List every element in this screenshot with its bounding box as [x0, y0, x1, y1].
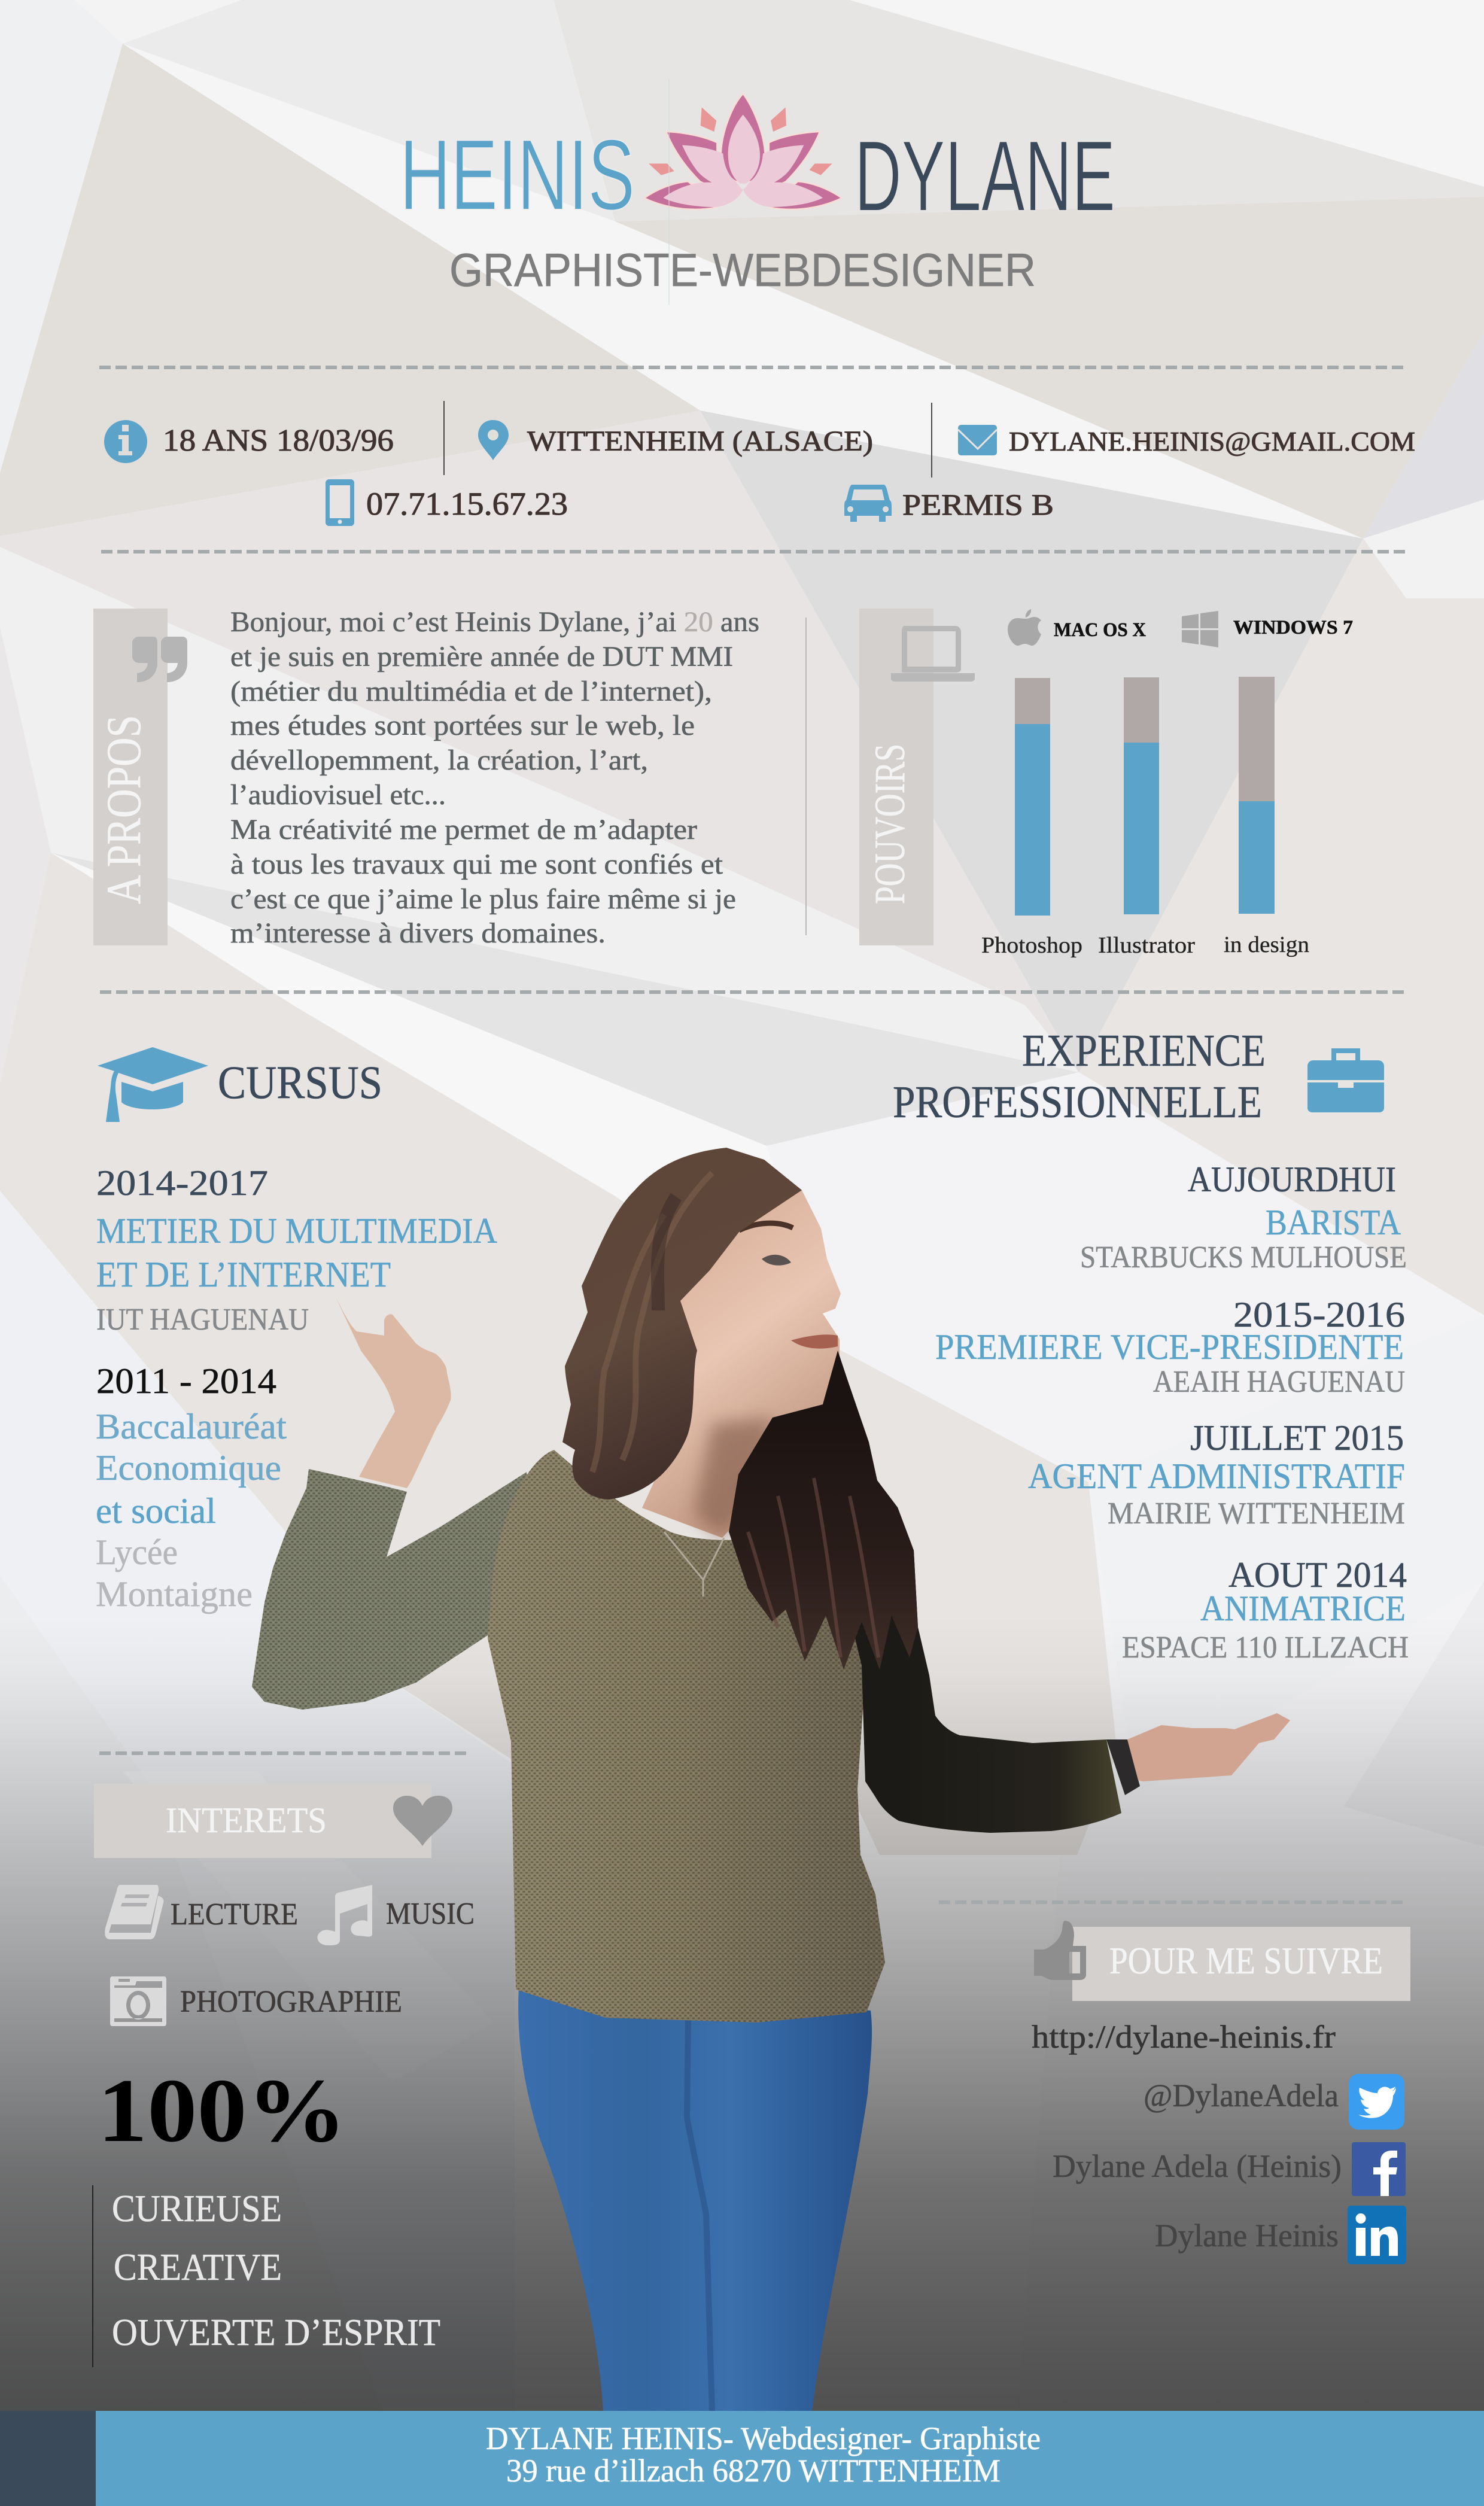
text block: about me: Ma créativité me permet de m’adapter [230, 814, 697, 846]
icon: heart [393, 1796, 452, 1846]
label: photographie: PHOTOGRAPHIE [180, 1985, 402, 2019]
list: experience entries: ANIMATRICE [1200, 1589, 1406, 1628]
website link: http://dylane-heinis.fr [1032, 2019, 1336, 2055]
list: cursus entries: 2011 - 2014 [96, 1361, 276, 1401]
text block: about me: c’est ce que j’aime le plus faire même si je [230, 883, 736, 915]
icon: envelope [958, 425, 997, 455]
text block: about me: (métier du multimédia et de l’internet), [230, 676, 712, 707]
bar: illustrator [1124, 677, 1159, 914]
necklace [664, 1532, 724, 1596]
panel: a propos [93, 609, 187, 945]
text block: about me: mes études sont portées sur le web, le [230, 710, 695, 741]
label: mac os x: MAC OS X [1054, 619, 1146, 641]
icon: lotus logo [644, 94, 842, 209]
list: experience entries: AEAIH HAGUENAU [1153, 1365, 1405, 1399]
list: cursus entries: METIER DU MULTIMEDIA [96, 1211, 497, 1251]
label: illustrator: Illustrator [1098, 933, 1195, 958]
list: experience entries: AGENT ADMINISTRATIF [1028, 1456, 1405, 1496]
email address: DYLANE.HEINIS@GMAIL.COM [1009, 426, 1415, 457]
experience title line 1: EXPERIENCE [1022, 1026, 1266, 1076]
location: WITTENHEIM (ALSACE) [527, 425, 873, 457]
list: experience entries: JUILLET 2015 [1190, 1418, 1404, 1458]
text block: about me: et je suis en première année de DUT MMI [230, 641, 733, 673]
label: photoshop: Photoshop [981, 933, 1082, 958]
person: standing woman photo cut-out [252, 1148, 1290, 2411]
list: experience entries: BARISTA [1266, 1203, 1401, 1242]
open right hand [1127, 1713, 1290, 1781]
panel: pour me suivre [1034, 1921, 1410, 2001]
icon: briefcase [1307, 1048, 1384, 1112]
footer name line: DYLANE HEINIS- Webdesigner- Graphiste [486, 2420, 1041, 2456]
icon: windows [1182, 611, 1218, 647]
text block: about me: à tous les travaux qui me sont confiés et [230, 848, 723, 880]
list: cursus entries: 2014-2017 [96, 1163, 268, 1203]
social: linkedin: Dylane Heinis [1155, 2218, 1339, 2253]
icon: apple [1008, 609, 1041, 646]
panel: pouvoirs [859, 609, 975, 945]
interests list [105, 1885, 475, 2026]
sweater torso [488, 1450, 898, 2023]
footer address line: 39 rue d’illzach 68270 WITTENHEIM [506, 2453, 1001, 2489]
list: cursus entries: Lycée [96, 1532, 178, 1572]
title: DYLANE: DYLANE [854, 120, 1115, 232]
heading: pouvoirs: POUVOIRS [866, 744, 914, 904]
long dark hair on the right [729, 1351, 918, 1669]
list: experience entries [935, 1160, 1409, 1665]
list: experience entries: AOUT 2014 [1228, 1555, 1407, 1595]
age and birth date: 18 ANS 18/03/96 [163, 424, 394, 458]
heading: pour me suivre: POUR ME SUIVRE [1109, 1939, 1383, 1982]
bar: photoshop [1015, 678, 1050, 916]
icon: car [844, 485, 892, 522]
heading: cursus [98, 1047, 382, 1122]
brown hair on the left [562, 1148, 802, 1500]
social: twitter [1144, 2074, 1404, 2130]
heading: a propos: A PROPOS [96, 715, 151, 904]
right sleeve [838, 1496, 1121, 1833]
experience title line 2: PROFESSIONNELLE [893, 1077, 1262, 1127]
list: cursus entries [96, 1163, 497, 1614]
list: experience entries: ESPACE 110 ILLZACH [1122, 1631, 1409, 1665]
text block: about me: dévellopemment, la création, l’art, [230, 744, 648, 776]
panel: interets [94, 1784, 452, 1858]
heading: interets: INTERETS [166, 1801, 327, 1840]
bar: in design [1239, 677, 1275, 914]
text block: about me: l’audiovisuel etc... [230, 779, 446, 811]
qualities list: OUVERTE D’ESPRIT [112, 2311, 440, 2353]
list: experience entries: AUJOURDHUI [1188, 1160, 1396, 1199]
heading: experience [893, 1026, 1384, 1127]
qualities list: CREATIVE [114, 2246, 282, 2288]
title: HEINIS: HEINIS [400, 118, 635, 231]
icon: linkedin [1348, 2206, 1406, 2264]
qualities list [93, 2185, 440, 2367]
text block: about me [230, 606, 759, 949]
raised left hand [336, 1297, 451, 1488]
social: twitter: @DylaneAdela [1144, 2078, 1339, 2113]
list: cursus entries: Baccalauréat [96, 1407, 287, 1446]
left sleeve [252, 1469, 530, 1710]
list: experience entries: MAIRIE WITTENHEIM [1108, 1497, 1405, 1531]
bracelets [1106, 1739, 1140, 1795]
list: experience entries: PREMIERE VICE-PRESIDENTE [935, 1327, 1404, 1367]
label: music: MUSIC [386, 1897, 475, 1931]
phone number: 07.71.15.67.23 [366, 486, 568, 522]
icon: twitter [1349, 2074, 1404, 2130]
icon: music note [317, 1885, 372, 1945]
list: cursus entries: Economique [96, 1448, 281, 1488]
icon: graduation cap [98, 1047, 208, 1122]
list: experience entries: STARBUCKS MULHOUSE [1080, 1240, 1407, 1275]
icon: book [105, 1885, 163, 1939]
icon: facebook [1352, 2142, 1406, 2196]
driving licence: PERMIS B [902, 488, 1054, 521]
cursus title: CURSUS [218, 1056, 382, 1108]
icon: thumbs up [1034, 1921, 1086, 1980]
list: cursus entries: Montaigne [96, 1574, 253, 1614]
label: lecture: LECTURE [171, 1897, 298, 1932]
icon: info [104, 420, 147, 463]
title guide line [668, 80, 670, 305]
icon: camera [110, 1976, 166, 2026]
label: in design: in design [1224, 932, 1309, 957]
icon: location pin [478, 420, 509, 460]
label: windows 7: WINDOWS 7 [1233, 617, 1353, 638]
subtitle: job title: GRAPHISTE-WEBDESIGNER [449, 244, 1036, 296]
face and neck [642, 1160, 841, 1538]
footer bar [0, 2411, 1484, 2506]
icon: phone [326, 479, 354, 526]
social: linkedin [1155, 2206, 1406, 2264]
contact info row [104, 420, 1415, 526]
qualities list: CURIEUSE [112, 2187, 282, 2230]
jeans [518, 1987, 872, 2411]
list: cursus entries: IUT HAGUENAU [96, 1303, 309, 1337]
social: facebook [1053, 2142, 1406, 2196]
list: cursus entries: et social [96, 1491, 216, 1531]
text block: about me: m’interesse à divers domaines. [230, 917, 606, 949]
chart: software skills [981, 609, 1353, 958]
list: cursus entries: ET DE L’INTERNET [96, 1255, 391, 1294]
icon: quotation mark [132, 637, 187, 682]
big number: 100%: 100% [98, 2060, 346, 2161]
icon: laptop [891, 626, 975, 682]
social: facebook: Dylane Adela (Heinis) [1053, 2148, 1342, 2184]
text block: about me: Bonjour, moi c’est Heinis Dylane, j’ai 20 ans [230, 606, 759, 638]
list: experience entries: 2015-2016 [1233, 1295, 1405, 1334]
